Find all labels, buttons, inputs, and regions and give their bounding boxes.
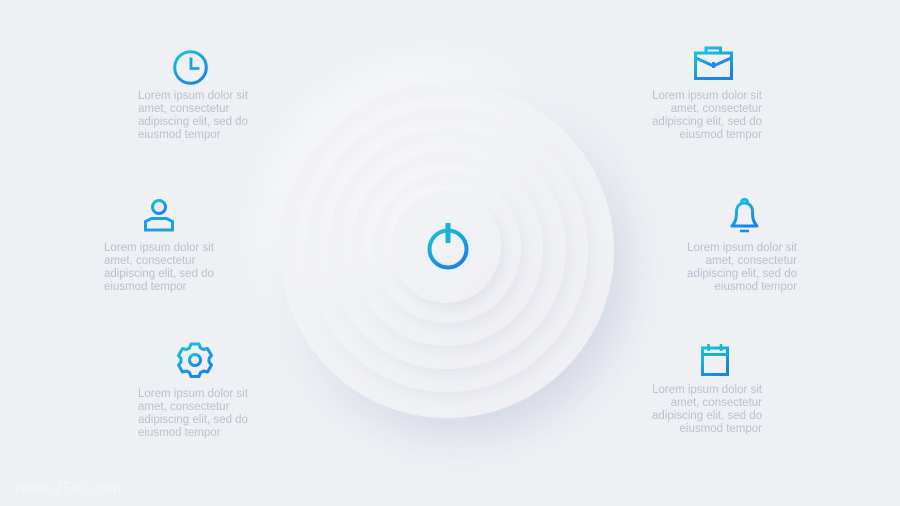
icon: bell <box>732 199 757 231</box>
text: top right: adipiscing elit, sed do <box>652 116 762 128</box>
text: middle right: eiusmod tempor <box>715 281 797 293</box>
text: middle left: eiusmod tempor <box>104 281 186 293</box>
icon: person <box>146 200 172 230</box>
icon: calendar <box>702 344 728 374</box>
text: bottom right: amet, consectetur <box>671 397 762 409</box>
text: bottom left: adipiscing elit, sed do <box>138 414 248 426</box>
text: middle left: Lorem ipsum dolor sit <box>104 242 214 254</box>
text: top left: adipiscing elit, sed do <box>138 116 248 128</box>
text: middle right: adipiscing elit, sed do <box>687 268 797 280</box>
text: middle left: adipiscing elit, sed do <box>104 268 214 280</box>
text: middle right: amet, consectetur <box>706 255 797 267</box>
text: bottom right: eiusmod tempor <box>680 423 762 435</box>
text: top left: amet, consectetur <box>138 103 229 115</box>
text: top right: eiusmod tempor <box>680 129 762 141</box>
text: bottom right: adipiscing elit, sed do <box>652 410 762 422</box>
ring 4 <box>328 129 566 369</box>
text: top left <box>138 90 248 141</box>
text: middle left: amet, consectetur <box>104 255 195 267</box>
text: top right: amet, consectetur <box>671 103 762 115</box>
text: middle right <box>687 242 797 293</box>
text: top right <box>652 90 762 141</box>
text: bottom left: eiusmod tempor <box>138 427 220 439</box>
text: bottom left <box>138 388 248 439</box>
text: top right: Lorem ipsum dolor sit <box>652 90 762 102</box>
text: middle left <box>104 242 214 293</box>
icon: gear <box>178 344 212 376</box>
text: middle right: Lorem ipsum dolor sit <box>687 242 797 254</box>
icon: clock <box>175 52 206 83</box>
text: top left: eiusmod tempor <box>138 129 220 141</box>
ring 6 <box>280 83 614 418</box>
text: bottom right: Lorem ipsum dolor sit <box>652 384 762 396</box>
icon: power button <box>430 223 466 268</box>
text: top left: Lorem ipsum dolor sit <box>138 90 248 102</box>
text: bottom left: amet, consectetur <box>138 401 229 413</box>
watermark: www.25xt.com <box>14 480 122 497</box>
ring 3 <box>351 151 543 346</box>
text: bottom left: Lorem ipsum dolor sit <box>138 388 248 400</box>
icon: briefcase <box>696 48 732 78</box>
ring 2 <box>373 172 521 323</box>
ring 1 <box>391 190 501 303</box>
ring 5 <box>306 107 588 392</box>
text: bottom right <box>652 384 762 435</box>
